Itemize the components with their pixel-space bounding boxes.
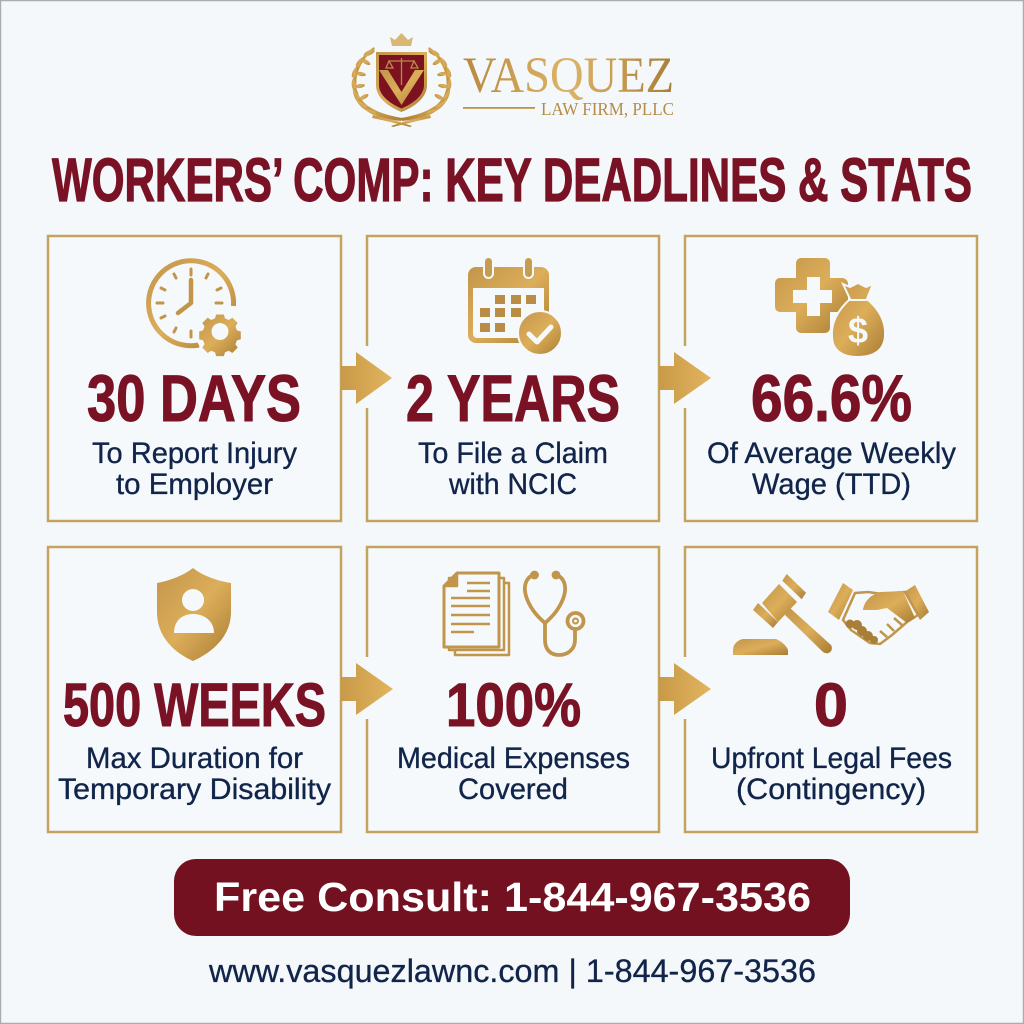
panel: 100% <box>367 547 659 832</box>
stat: 66.6%: 66.6% <box>751 361 912 435</box>
icon: shield with V and scales <box>376 52 427 112</box>
caption: Medical Expenses <box>397 742 630 775</box>
icon: calendar with check <box>468 257 562 355</box>
stat: 2 years: 2 YEARS <box>406 361 620 435</box>
footer contact line: www.vasquezlawnc.com | 1-844-967-3536 <box>208 953 816 989</box>
caption line 2: with NCIC <box>448 468 577 501</box>
icon: handshake <box>828 583 929 644</box>
panel: 2 years <box>367 236 659 521</box>
icon: documents <box>444 573 509 655</box>
button text: Free Consult: 1-844-967-3536 <box>214 874 811 920</box>
stat: zero: 0 <box>814 671 848 739</box>
caption line 2: (Contingency) <box>736 773 926 806</box>
icon: medical cross and money bag: $ <box>848 310 868 351</box>
caption: To File a Claim <box>418 437 608 470</box>
icon: shield with person <box>157 568 231 661</box>
stat: 100%: 100% <box>446 671 581 739</box>
caption line 2: Temporary Disability <box>58 773 331 806</box>
arrow 1 <box>341 346 392 408</box>
logo subtitle: LAW FIRM, PLLC <box>541 99 674 119</box>
icon: clock with gear <box>149 261 245 356</box>
panel: 66.6% <box>685 236 977 521</box>
panel: 0 fees <box>685 547 977 832</box>
logo wordmark: VASQUEZ <box>463 48 674 104</box>
caption: Upfront Legal Fees <box>711 742 952 775</box>
arrow 3 <box>341 657 393 719</box>
caption: Of Average Weekly <box>707 437 956 470</box>
stat: 30 days: 30 DAYS <box>87 361 301 435</box>
stat: 500 weeks: 500 WEEKS <box>63 671 326 739</box>
panel: 500 weeks <box>48 547 341 832</box>
caption: Max Duration for <box>86 742 303 775</box>
arrow 4 <box>659 657 711 719</box>
call to action button <box>174 859 850 936</box>
caption line 2: Covered <box>458 773 568 806</box>
panel: 30 days <box>48 236 341 521</box>
caption line 2: Wage (TTD) <box>752 468 911 501</box>
icon: laurel wreath <box>350 47 453 127</box>
icon: medical cross and money bag <box>775 258 885 357</box>
icon: crown <box>390 33 413 46</box>
icon: stethoscope <box>525 572 584 655</box>
caption: To Report Injury <box>92 437 297 470</box>
icon: gavel <box>733 574 832 655</box>
arrow 2 <box>659 346 711 408</box>
caption line 2: to Employer <box>116 468 273 501</box>
logo: Vasquez Law Firm <box>350 33 674 127</box>
logo divider line <box>463 107 535 109</box>
